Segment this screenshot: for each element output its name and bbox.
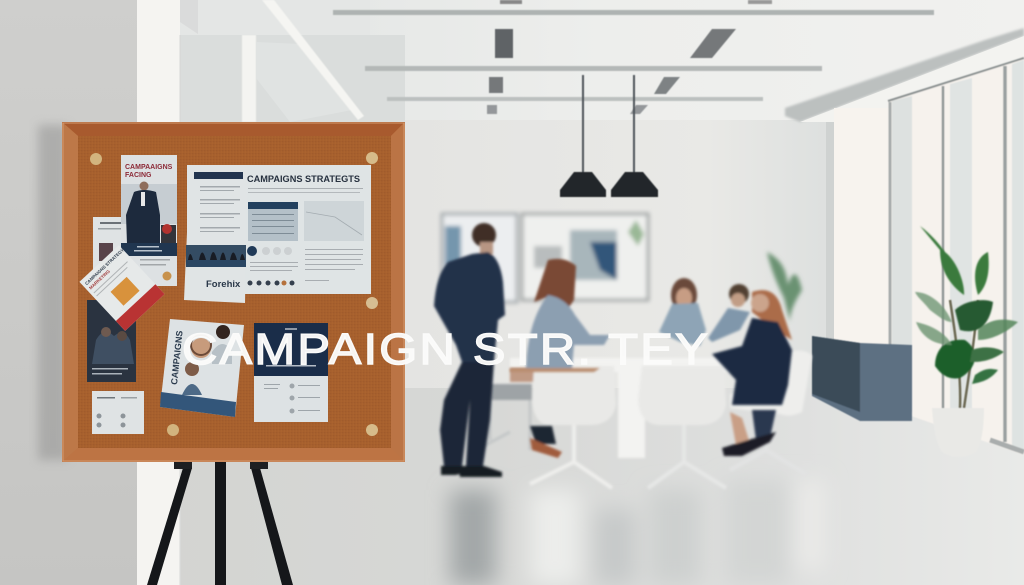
sheet table: [248, 202, 298, 209]
flyer: tilted strategy card: [79, 245, 165, 331]
flyer: tilted strategy card: MARKETING: [88, 268, 111, 290]
photo: team flyer: [87, 300, 136, 382]
upper alcove soffit: [256, 42, 352, 122]
woman left: [510, 259, 610, 458]
pins: [90, 152, 378, 436]
poster: campaigns strategies sheet: [187, 165, 371, 294]
brochure: faces: [160, 319, 244, 417]
easel brackets: [174, 461, 192, 469]
flyer: tilted strategy card: CAMPAIGNS STRATEGY: [84, 247, 125, 286]
easel legs: [147, 468, 192, 585]
easel: [147, 461, 293, 585]
potted plant: [915, 226, 1018, 457]
ceiling light strips: [333, 0, 934, 114]
sheet line chart: [304, 201, 364, 241]
ceiling: [180, 0, 1024, 125]
wooden frame: [62, 122, 405, 462]
diagonal ceiling edge: [262, 0, 364, 120]
social icons: [248, 280, 294, 286]
alcove ceiling: [180, 0, 370, 35]
business card: [92, 391, 144, 434]
board shadow: [38, 125, 68, 460]
poster: forehix sidebar: Forehix: [206, 279, 241, 290]
small plant behind meeting: [767, 252, 802, 322]
ceiling duct: [180, 0, 198, 34]
sheet icons: [247, 246, 257, 256]
sheet body lines: [250, 249, 363, 281]
sheet heading: CAMPAIGNS STRATEGTS: [247, 174, 360, 184]
left alcove wall: [180, 35, 405, 122]
woman centre: [659, 278, 706, 346]
standing man: [434, 223, 505, 477]
floor: [137, 388, 1024, 585]
alcove white post: [242, 35, 256, 122]
corkboard: [62, 122, 405, 462]
people: [434, 223, 792, 477]
framed art on wall: [442, 214, 648, 302]
leaves: [915, 226, 1018, 384]
title overlay: CAMPAIGN STR. TEY: [182, 325, 710, 374]
stem: [950, 300, 978, 408]
brochure: faces: CAMPAIGNS: [169, 330, 185, 385]
woman right: [712, 290, 792, 456]
poster: campaign portrait: FACING: [125, 172, 152, 179]
right chair: [638, 366, 726, 488]
back chair on left: [486, 384, 532, 400]
left chair: [530, 366, 616, 488]
poster: back flyer: [93, 217, 133, 277]
table: [510, 358, 760, 458]
right column: [834, 108, 889, 348]
poster: forehix sidebar: [184, 165, 247, 303]
poster: campaign portrait: CAMPAAIGNS: [125, 164, 173, 171]
floor reflections: [450, 480, 825, 585]
cork surface: [78, 136, 391, 448]
man seated: [708, 284, 750, 342]
meeting: table and chairs: [480, 351, 812, 488]
back wall: [400, 120, 840, 390]
left wall and pillar: [0, 0, 181, 585]
pendant lamps: [560, 75, 658, 197]
brochure: navy flyer: [254, 323, 328, 422]
poster: campaign portrait: [121, 155, 177, 286]
windows: [888, 58, 1024, 455]
pot: [932, 408, 984, 457]
cabinet: [812, 336, 912, 421]
far right chair: [730, 351, 812, 474]
right ceiling bulkhead: [785, 28, 1024, 122]
